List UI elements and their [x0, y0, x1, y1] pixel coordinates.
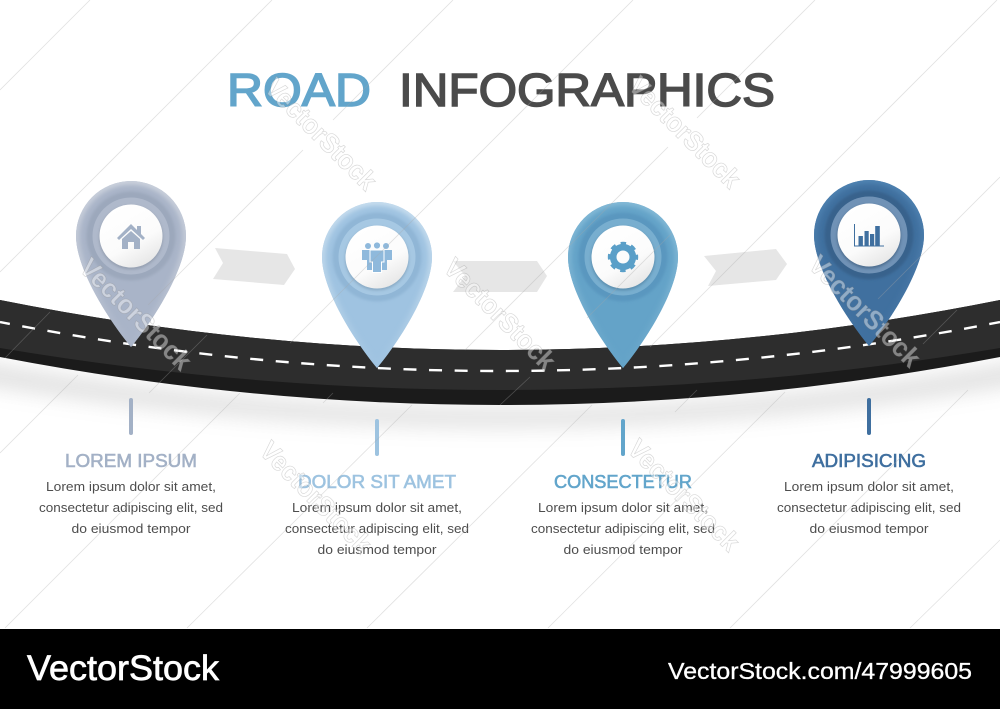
pin 3: gear — [568, 202, 678, 368]
text block 3: do eiusmod tempor — [564, 542, 683, 557]
watermark text: VectorStock — [623, 70, 747, 195]
watermark text — [74, 70, 927, 560]
text block 4: ADIPISICING — [812, 451, 926, 471]
text block 4: consectetur adipiscing elit, sed — [777, 500, 961, 515]
divider 3 — [621, 419, 625, 456]
text block 4: Lorem ipsum dolor sit amet, — [784, 479, 954, 494]
arrow 3 — [704, 249, 787, 286]
text block 1: LOREM IPSUM — [65, 451, 197, 471]
road — [0, 300, 1000, 405]
icon: gear — [610, 244, 636, 270]
text block 3: Lorem ipsum dolor sit amet, — [538, 500, 708, 515]
watermark text: VectorStock — [254, 435, 378, 560]
text block 1: Lorem ipsum dolor sit amet, — [46, 479, 216, 494]
pin 1: home — [76, 181, 186, 347]
text block 3: CONSECTETUR — [554, 472, 692, 492]
text block 2: DOLOR SIT AMET — [298, 472, 456, 492]
watermark text: VectorStock — [803, 249, 927, 374]
text block 2: consectetur adipiscing elit, sed — [285, 521, 469, 536]
road shadow — [0, 362, 1000, 425]
footer bar — [0, 629, 1000, 709]
pin 2: people — [322, 202, 432, 368]
watermark text: VectorStock — [438, 252, 562, 377]
title: INFOGRAPHICS — [399, 64, 775, 116]
footer bar: VectorStock — [27, 649, 220, 688]
text block 1 — [39, 451, 223, 536]
pin 4: chart — [814, 180, 924, 346]
text block 3: consectetur adipiscing elit, sed — [531, 521, 715, 536]
arrow 2 — [453, 261, 547, 292]
arrow 1 — [213, 248, 295, 285]
footer bar: VectorStock.com/47999605 — [668, 658, 972, 684]
watermark text: VectorStock — [259, 72, 383, 197]
title: ROAD — [227, 64, 371, 116]
divider 2 — [375, 419, 379, 456]
text block 2: Lorem ipsum dolor sit amet, — [292, 500, 462, 515]
title — [227, 64, 775, 116]
watermark text: VectorStock — [74, 252, 198, 377]
text block 3 — [531, 472, 715, 557]
divider 1 — [129, 398, 133, 435]
icon: people — [362, 242, 392, 272]
text block 2 — [285, 472, 469, 557]
icon: bar chart — [854, 224, 884, 246]
divider 4 — [867, 398, 871, 435]
watermark text: VectorStock — [622, 433, 746, 558]
text block 4: do eiusmod tempor — [810, 521, 929, 536]
text block 1: consectetur adipiscing elit, sed — [39, 500, 223, 515]
text block 4 — [777, 451, 961, 536]
text block 1: do eiusmod tempor — [72, 521, 191, 536]
icon: house — [117, 224, 145, 249]
text block 2: do eiusmod tempor — [318, 542, 437, 557]
